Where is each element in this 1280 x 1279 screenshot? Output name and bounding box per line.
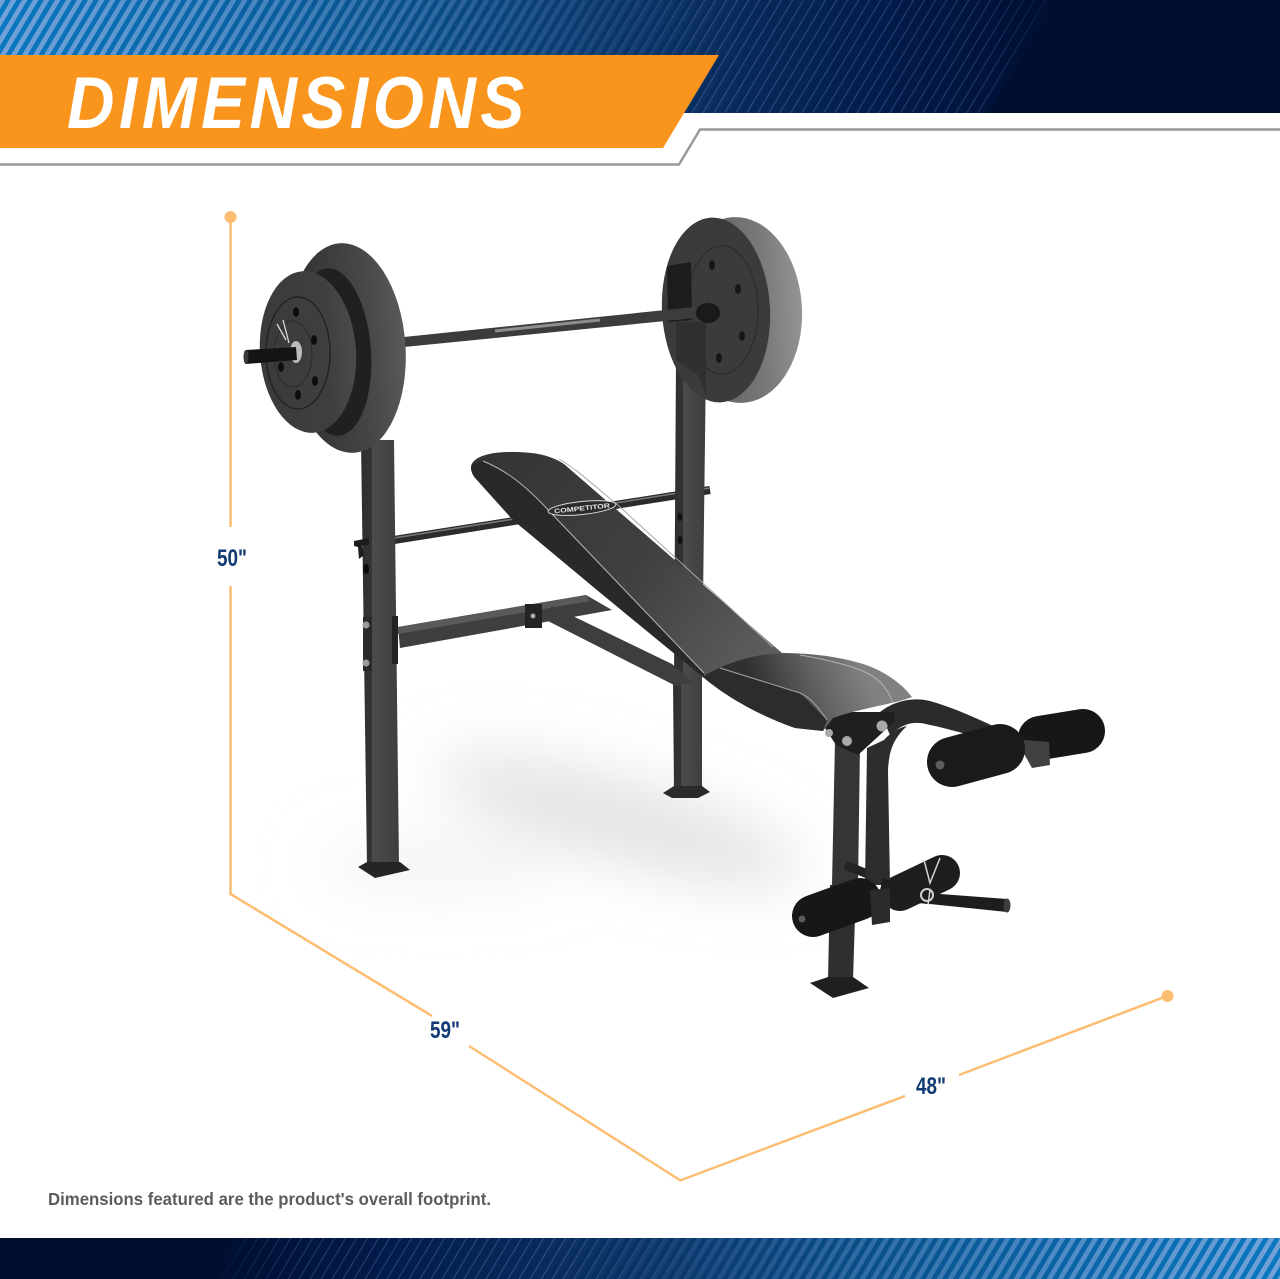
height dimension line	[224, 211, 236, 895]
rear lower leg roller	[900, 873, 942, 893]
header underline	[0, 130, 1280, 164]
cross tube	[398, 595, 612, 648]
title banner	[0, 55, 719, 148]
rack support bar	[394, 488, 710, 540]
right weight plate	[657, 214, 807, 406]
top header band	[0, 0, 1280, 113]
front leg post	[810, 740, 869, 998]
incline back pad	[471, 452, 782, 678]
title: DIMENSIONS	[67, 62, 524, 144]
roller cross rod	[845, 865, 870, 875]
main barbell	[404, 303, 720, 347]
width dimension line	[680, 990, 1174, 1180]
seat pad	[703, 653, 912, 731]
brace bracket	[525, 604, 542, 628]
lower weight horn	[880, 858, 1010, 912]
leg lever arm	[880, 699, 1004, 742]
label: width 48 inches: 48"	[916, 1073, 946, 1100]
label: depth 59 inches: 59"	[430, 1017, 460, 1044]
diagonal brace	[544, 606, 692, 686]
depth dimension line	[230, 894, 680, 1180]
lower foam roller	[798, 888, 890, 925]
brand logo: COMPETITOR	[554, 503, 611, 515]
floor shadow	[320, 729, 814, 911]
upper foam rollers	[936, 731, 1083, 770]
footnote: Dimensions featured are the product's overall footprint.	[48, 1189, 491, 1209]
pivot bracket	[825, 712, 895, 755]
left weight plates	[254, 239, 413, 457]
curved leg extension strut	[865, 726, 907, 885]
barbell left end	[244, 347, 297, 364]
left upright	[354, 440, 410, 878]
rear right upright	[663, 360, 710, 798]
brand logo	[548, 498, 616, 518]
bottom footer band	[0, 1238, 1280, 1279]
icon: weight bench	[244, 214, 1083, 998]
label: height 50 inches: 50"	[217, 545, 247, 572]
